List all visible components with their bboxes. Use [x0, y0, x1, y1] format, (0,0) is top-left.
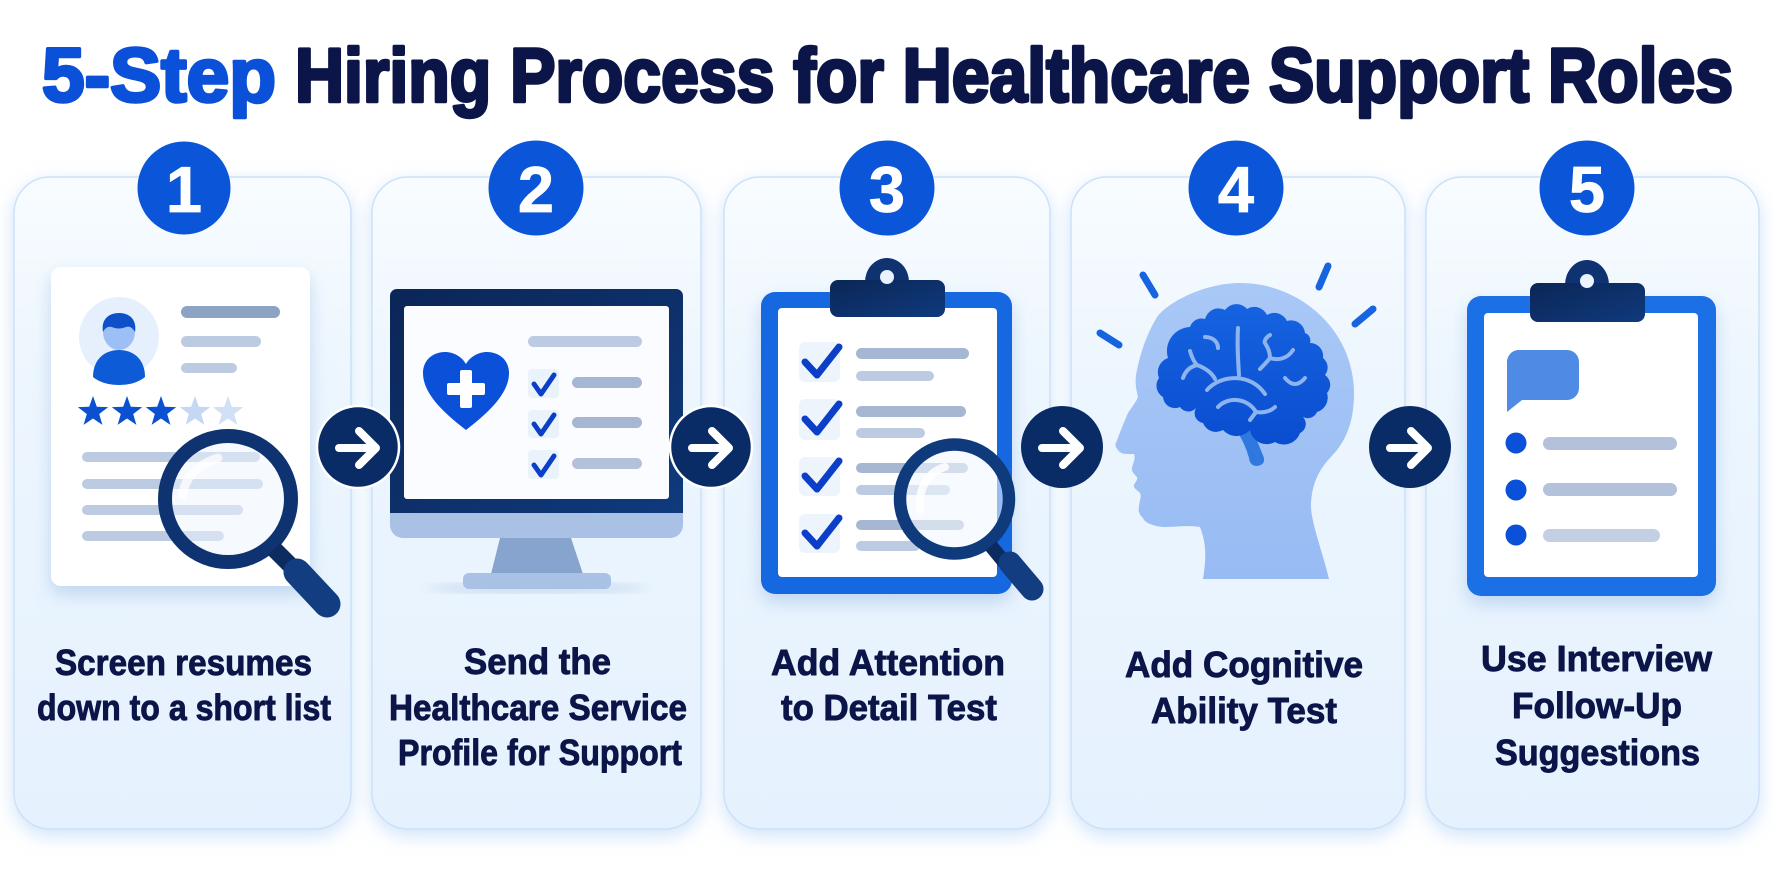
panel: step 5 interview follow-up suggestions [1426, 140, 1759, 829]
step 2 label: Send the [464, 641, 611, 682]
icon: clipboard checklist [761, 258, 1012, 594]
icon: speech bubble [1507, 350, 1579, 412]
icon: magnifying glass [900, 444, 1032, 589]
step 3 label: to Detail Test [781, 687, 997, 728]
icon: head silhouette with brain [1100, 266, 1373, 579]
step 5 label: Use Interview [1481, 638, 1713, 679]
arrow: step 4 to 5 [1369, 406, 1451, 488]
step 4 label: Ability Test [1151, 690, 1337, 731]
icon: resume document [51, 267, 310, 586]
panel: step 2 healthcare service profile [372, 140, 701, 829]
step 1 label: down to a short list [37, 687, 331, 728]
title: 5-Step [42, 34, 276, 118]
step number 3: 3 [869, 153, 905, 226]
step 2 label: Healthcare Service [389, 687, 687, 728]
panel: step 3 attention to detail test [724, 140, 1050, 829]
step 2 label [389, 641, 687, 773]
step 5 label [1481, 638, 1713, 773]
icon: clipboard with speech bubble [1467, 260, 1716, 596]
step number 3 [840, 140, 934, 236]
arrow: step 1 to 2 [317, 406, 399, 488]
panel: step 4 cognitive ability test [1071, 140, 1405, 829]
panel: step 1 screen resumes [14, 142, 351, 829]
step number 5 [1540, 140, 1634, 236]
icon: magnifying glass [165, 436, 327, 604]
step 2 label: Profile for Support [398, 732, 682, 773]
step number 4 [1188, 140, 1284, 236]
step number 5: 5 [1569, 153, 1605, 226]
icon: computer monitor [390, 289, 683, 593]
step 1 label [37, 642, 331, 728]
icon: heart with plus [423, 352, 509, 430]
step number 2: 2 [518, 153, 554, 226]
step 5 label: Follow-Up [1512, 685, 1682, 726]
step 4 label: Add Cognitive [1125, 644, 1363, 685]
step 5 label: Suggestions [1495, 732, 1700, 773]
step 1 label: Screen resumes [55, 642, 312, 683]
step 3 label: Add Attention [771, 642, 1005, 683]
step number 1: 1 [166, 153, 202, 226]
step number 2 [488, 140, 584, 236]
arrow: step 3 to 4 [1021, 406, 1103, 488]
step 3 label [771, 642, 1005, 728]
step 4 label [1125, 644, 1363, 731]
arrow: step 2 to 3 [670, 406, 752, 488]
step number 4: 4 [1218, 153, 1254, 226]
step number 1 [138, 142, 230, 234]
